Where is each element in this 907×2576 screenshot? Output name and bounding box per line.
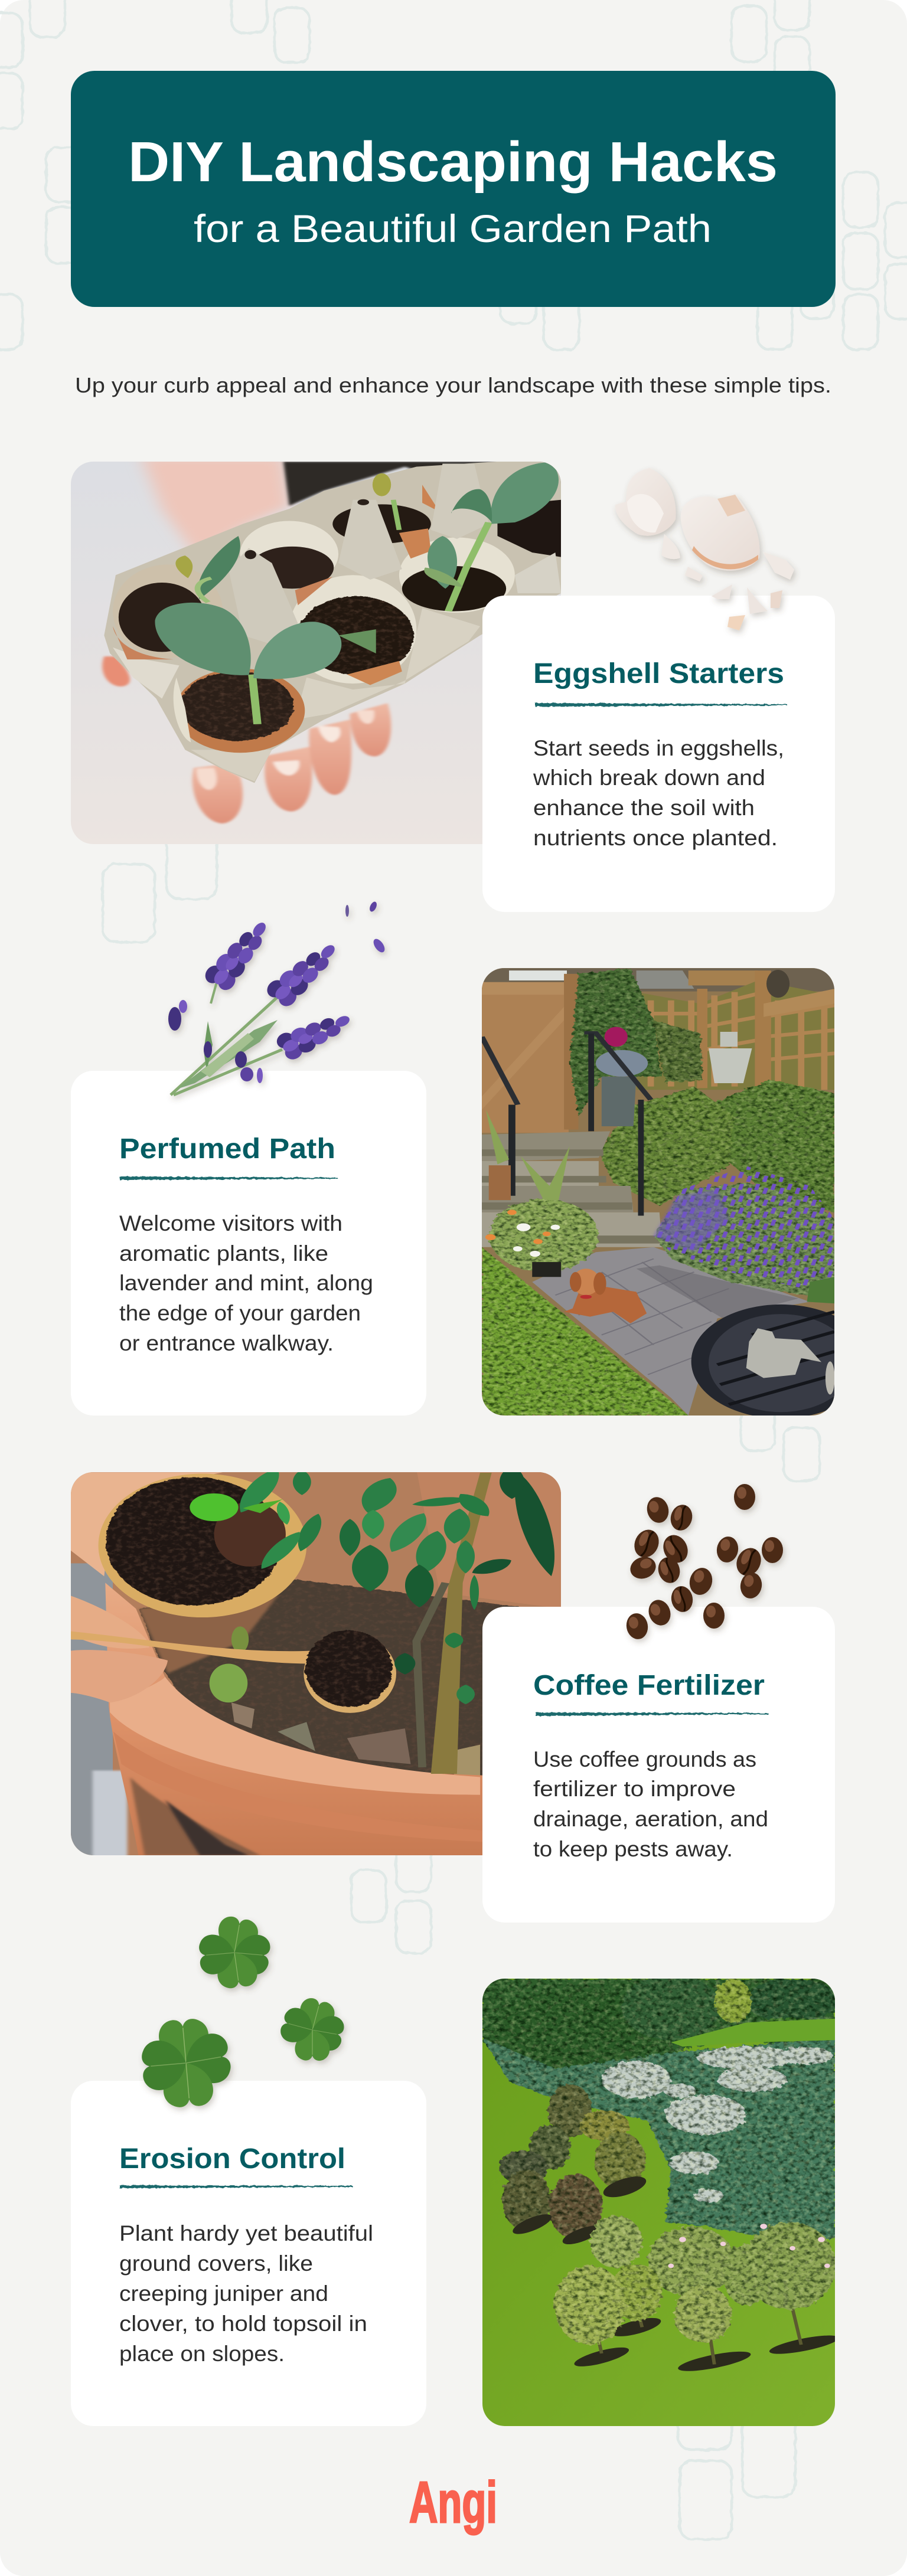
heading: Eggshell Starters <box>533 658 784 689</box>
gate <box>482 982 569 1133</box>
card: erosion control <box>71 2081 426 2426</box>
heading: Coffee Fertilizer <box>533 1670 765 1701</box>
body text: the edge of your garden <box>119 1301 361 1325</box>
brush underline <box>119 2185 353 2188</box>
logo: Angi: Angi <box>409 2470 497 2535</box>
icon: clover right <box>278 1996 345 2061</box>
lantern <box>709 1048 752 1083</box>
pavers <box>532 1247 810 1416</box>
spoon and lower hand <box>71 1596 149 1649</box>
body text <box>533 736 784 850</box>
body text <box>119 2221 373 2366</box>
photo: slope with ground covers and shrubs <box>474 1972 844 2433</box>
body text: aromatic plants, like <box>119 1241 328 1266</box>
carton peaks <box>229 548 298 645</box>
card: eggshell starters <box>482 596 835 912</box>
body text: fertilizer to improve <box>533 1777 736 1801</box>
carton <box>104 462 561 783</box>
body text: which break down and <box>533 766 765 790</box>
body text: enhance the soil with <box>533 796 755 820</box>
icon: lavender sprigs <box>168 901 387 1095</box>
body text <box>533 1747 768 1861</box>
body text <box>119 1211 373 1355</box>
brush underline <box>536 1712 768 1716</box>
fingers <box>102 656 391 823</box>
body text: lavender and mint, along <box>119 1271 373 1295</box>
icon: coffee beans <box>624 1484 783 1641</box>
body text: Start seeds in eggshells, <box>533 736 784 760</box>
body text: or entrance walkway. <box>119 1331 334 1355</box>
body text: drainage, aeration, and <box>533 1807 768 1831</box>
foliage <box>230 1466 566 1704</box>
steps <box>482 1131 610 1161</box>
lattice <box>637 970 835 1090</box>
pot <box>105 1583 564 1858</box>
ivy and hedges <box>570 968 835 1212</box>
photo: coffee grounds on potted plant <box>58 1466 579 1865</box>
body text: clover, to hold topsoil in <box>119 2312 367 2336</box>
body text: Plant hardy yet beautiful <box>119 2221 373 2245</box>
intro text: Up your curb appeal and enhance your landscape with these simple tips. <box>75 373 831 397</box>
icon: clover top <box>198 1915 271 1990</box>
card: perfumed path <box>71 1071 426 1416</box>
railings <box>482 1037 518 1104</box>
lawn <box>482 1247 689 1416</box>
card: coffee fertilizer <box>482 1607 835 1923</box>
heading: Perfumed Path <box>119 1133 335 1165</box>
body text: to keep pests away. <box>533 1837 733 1861</box>
table with bird <box>691 1305 870 1418</box>
brush underline <box>535 703 787 707</box>
icon: broken eggshells <box>615 468 794 630</box>
dark rounded shrubs <box>499 2084 645 2240</box>
subtitle: for a Beautiful Garden Path <box>194 207 712 250</box>
body text: Welcome visitors with <box>119 1211 342 1235</box>
brush underline <box>119 1176 338 1180</box>
body text: place on slopes. <box>119 2342 285 2366</box>
icon: clover large <box>140 2017 234 2109</box>
body text: creeping juniper and <box>119 2281 328 2306</box>
lavender bush <box>654 1166 835 1302</box>
body text: ground covers, like <box>119 2251 313 2276</box>
title banner <box>71 71 836 307</box>
photo: garden steps with lavender and dog <box>482 968 834 1416</box>
heading: Erosion Control <box>119 2143 345 2175</box>
dog <box>564 1269 647 1323</box>
planter <box>489 1165 511 1200</box>
stems <box>431 1473 492 1774</box>
photo: seedlings in eggshells <box>58 455 579 852</box>
cells <box>113 564 223 658</box>
body text: Use coffee grounds as <box>533 1747 756 1771</box>
body text: nutrients once planted. <box>533 826 778 850</box>
bowl and hand <box>71 1472 223 1576</box>
flowering shrubs <box>596 2296 801 2365</box>
seedlings <box>252 675 257 724</box>
title: DIY Landscaping Hacks <box>128 130 778 194</box>
